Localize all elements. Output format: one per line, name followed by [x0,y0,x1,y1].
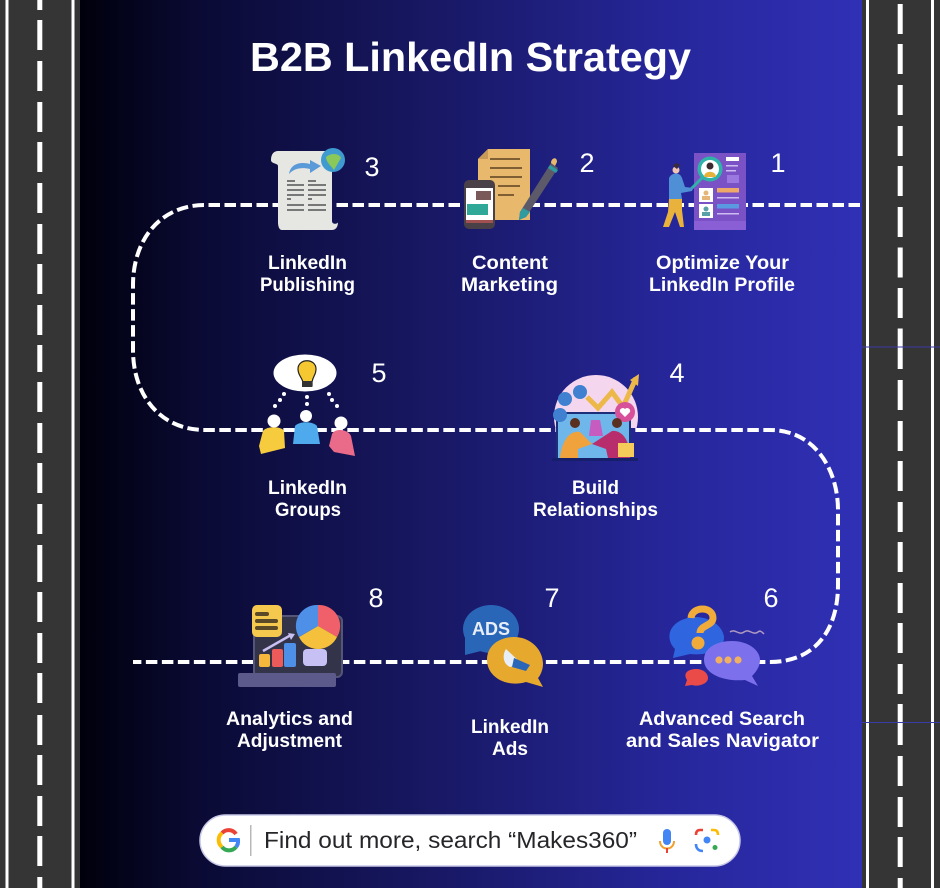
label: LinkedIn Publishing: LinkedIn [268,253,347,274]
step 7 number: 7 [544,583,560,613]
icon: group idea [259,354,355,456]
label: LinkedIn Ads: Ads [492,739,528,760]
label: Build Relationships: Build [572,478,619,499]
label: Build Relationships: Relationships [533,500,658,521]
icon: analytics dashboard [238,605,342,687]
icon: profile [663,153,746,230]
label: LinkedIn Groups: LinkedIn [268,478,347,499]
left road [0,0,80,888]
arrow: dashed road path [133,205,860,662]
icon: search question and chat bubbles [669,609,764,686]
icon: content document, phone and pen [464,149,558,229]
label: Optimize Your LinkedIn Profile: Optimize Your [656,253,790,274]
label: Analytics and Adjustment: Analytics and [226,709,353,730]
title: B2B LinkedIn Strategy [250,34,691,80]
label: Content Marketing [461,253,558,296]
icon: lens [696,830,718,851]
label: LinkedIn Groups: Groups [275,500,341,521]
label: Optimize Your LinkedIn Profile [649,253,795,296]
label: Advanced Search and Sales Navigator [626,709,820,752]
icon: microphone [660,829,674,853]
right road [862,0,940,888]
label: Advanced Search and Sales Navigator: and Sales Navigator [626,731,820,752]
step 5 number: 5 [371,358,387,388]
label: Optimize Your LinkedIn Profile: LinkedIn Profile [649,275,795,296]
step 3 number: 3 [364,152,380,182]
label: LinkedIn Ads [471,717,549,760]
step 8 number: 8 [368,583,384,613]
icon: ads bubbles and megaphone: ADS [472,619,510,639]
step 6 number: 6 [763,583,779,613]
label: Analytics and Adjustment: Adjustment [237,731,343,752]
icon: ads bubbles and megaphone [463,605,543,687]
step 1 number: 1 [770,148,786,178]
search bar: Find out more, search “Makes360” [264,827,637,853]
label: Analytics and Adjustment [226,709,353,752]
label: Advanced Search and Sales Navigator: Advanced Search [639,709,805,730]
label: LinkedIn Publishing: Publishing [260,275,355,296]
label: LinkedIn Ads: LinkedIn [471,717,549,738]
label: Content Marketing: Content [472,253,549,274]
label: Content Marketing: Marketing [461,275,558,296]
label: LinkedIn Publishing [260,253,355,296]
icon: publishing scroll and globe [271,148,345,230]
label: LinkedIn Groups [268,478,347,521]
icon: relationships [552,374,639,461]
step 2 number: 2 [579,148,595,178]
search bar [200,815,740,866]
label: Build Relationships [533,478,658,521]
step 4 number: 4 [669,358,685,388]
icon: google G [219,830,238,850]
